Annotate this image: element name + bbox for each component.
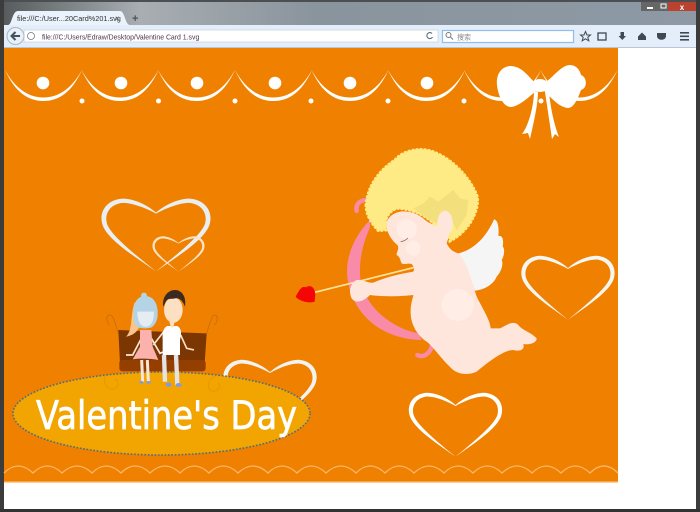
heart: bottom centre	[409, 393, 502, 457]
ellipse swirl ornaments	[104, 375, 220, 391]
title ellipse	[13, 372, 310, 455]
address bar	[7, 28, 438, 44]
garland of scallops and dots	[5, 70, 618, 104]
bench	[107, 315, 217, 371]
heart: small overlapping	[152, 236, 205, 272]
window controls	[641, 2, 696, 12]
toolbar icons	[580, 32, 689, 41]
body	[350, 211, 537, 374]
cupid	[296, 150, 537, 374]
cheek highlights	[397, 219, 474, 321]
ear	[437, 211, 453, 236]
card bottom edge	[4, 481, 618, 482]
browser tab: file:///C:/User...20Card%201.svg	[17, 14, 121, 23]
title text: Valentine's Day	[36, 394, 297, 439]
address bar: file:///C:/Users/Edraw/Desktop/Valentine Card 1.svg	[42, 34, 199, 42]
hair	[366, 150, 478, 241]
wing	[458, 219, 504, 291]
search box	[442, 30, 574, 42]
eye	[401, 238, 408, 242]
browser tab	[8, 11, 130, 25]
couple on bench	[126, 290, 194, 387]
heart: large upper left	[101, 199, 211, 271]
window controls: x	[680, 3, 685, 12]
girl	[126, 293, 168, 384]
arrow	[296, 267, 417, 302]
heart: behind ellipse	[223, 360, 317, 424]
search box: 搜索	[457, 32, 471, 42]
heart: right	[521, 256, 615, 320]
orange card background	[4, 48, 618, 482]
ribbon bow	[497, 65, 586, 139]
new tab plus: +	[132, 13, 138, 25]
bow weapon	[347, 200, 432, 356]
bottom wave border	[4, 466, 618, 473]
boy	[153, 290, 194, 387]
browser tab: ×	[115, 14, 120, 23]
